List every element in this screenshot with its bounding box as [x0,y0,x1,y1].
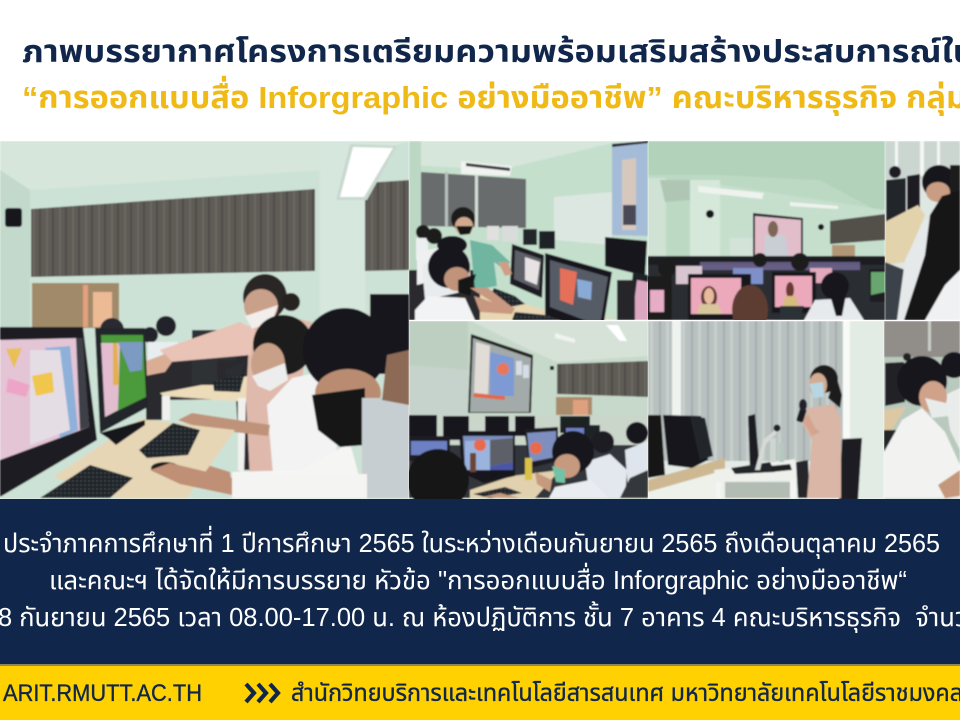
description line 1: ประจำภาคการศึกษาที่ 1 ปีการศึกษา 2565 ในระหว่างเดือนกันยายน 2565 ถึงเดือนตุลาคม 2565 [3,525,940,559]
photo: lecturer speaking with microphone [648,321,884,499]
teacher [246,318,312,480]
monitor small [510,244,544,298]
student 1 [267,372,337,498]
website address: ARIT.RMUTT.AC.TH [3,680,202,707]
description line 2: และคณะฯ ได้จัดให้มีการบรรยาย หัวข้อ "การออกแบบสื่อ Inforgraphic อย่างมืออาชีพ“ [49,562,907,595]
photo: student with white mask, cropped [884,321,960,499]
title line 2: “การออกแบบสื่อ Inforgraphic อย่างมืออาชีพ” คณะบริหารธุรกิจ กลุ่ม [22,75,960,116]
right monitor [628,272,648,320]
back row monitors [409,415,648,445]
desk and cabinet [648,458,725,492]
students [416,225,430,239]
photo: students with projector screen behind [409,321,648,499]
monitors [733,268,763,284]
chair [839,438,862,500]
footer: yellow band [0,664,960,720]
woman from behind [732,285,768,335]
photo: student with long hair, cropped [885,141,960,320]
photo: teacher among students at monitors [409,141,648,320]
teacher [470,240,510,290]
girl with ponytail [804,298,864,320]
monitors [648,415,665,478]
monitor big [545,253,612,335]
white table [714,459,797,482]
lecturer [803,404,841,498]
student 2 [232,443,365,498]
head [897,356,947,406]
audience [648,259,885,320]
students [407,449,469,511]
person at right background [941,352,960,378]
icon: triple chevrons [246,684,278,702]
lecture monitor and gooseneck microphone [748,414,760,470]
photo: wide classroom with projection screen [648,141,885,320]
desk [480,290,620,320]
desk [53,419,235,498]
desk and monitors [409,445,648,498]
shirt [884,408,960,498]
monitor 2 [95,328,148,433]
monitor 1 [0,327,97,497]
title line 1: ภาพบรรยากาศโครงการเตรียมความพร้อมเสริมสร้างประสบการณ์ใน [22,34,960,69]
photo: instructor pointing at student's monitor [0,141,409,499]
text panel: navy description band [0,499,960,665]
title [22,34,960,116]
